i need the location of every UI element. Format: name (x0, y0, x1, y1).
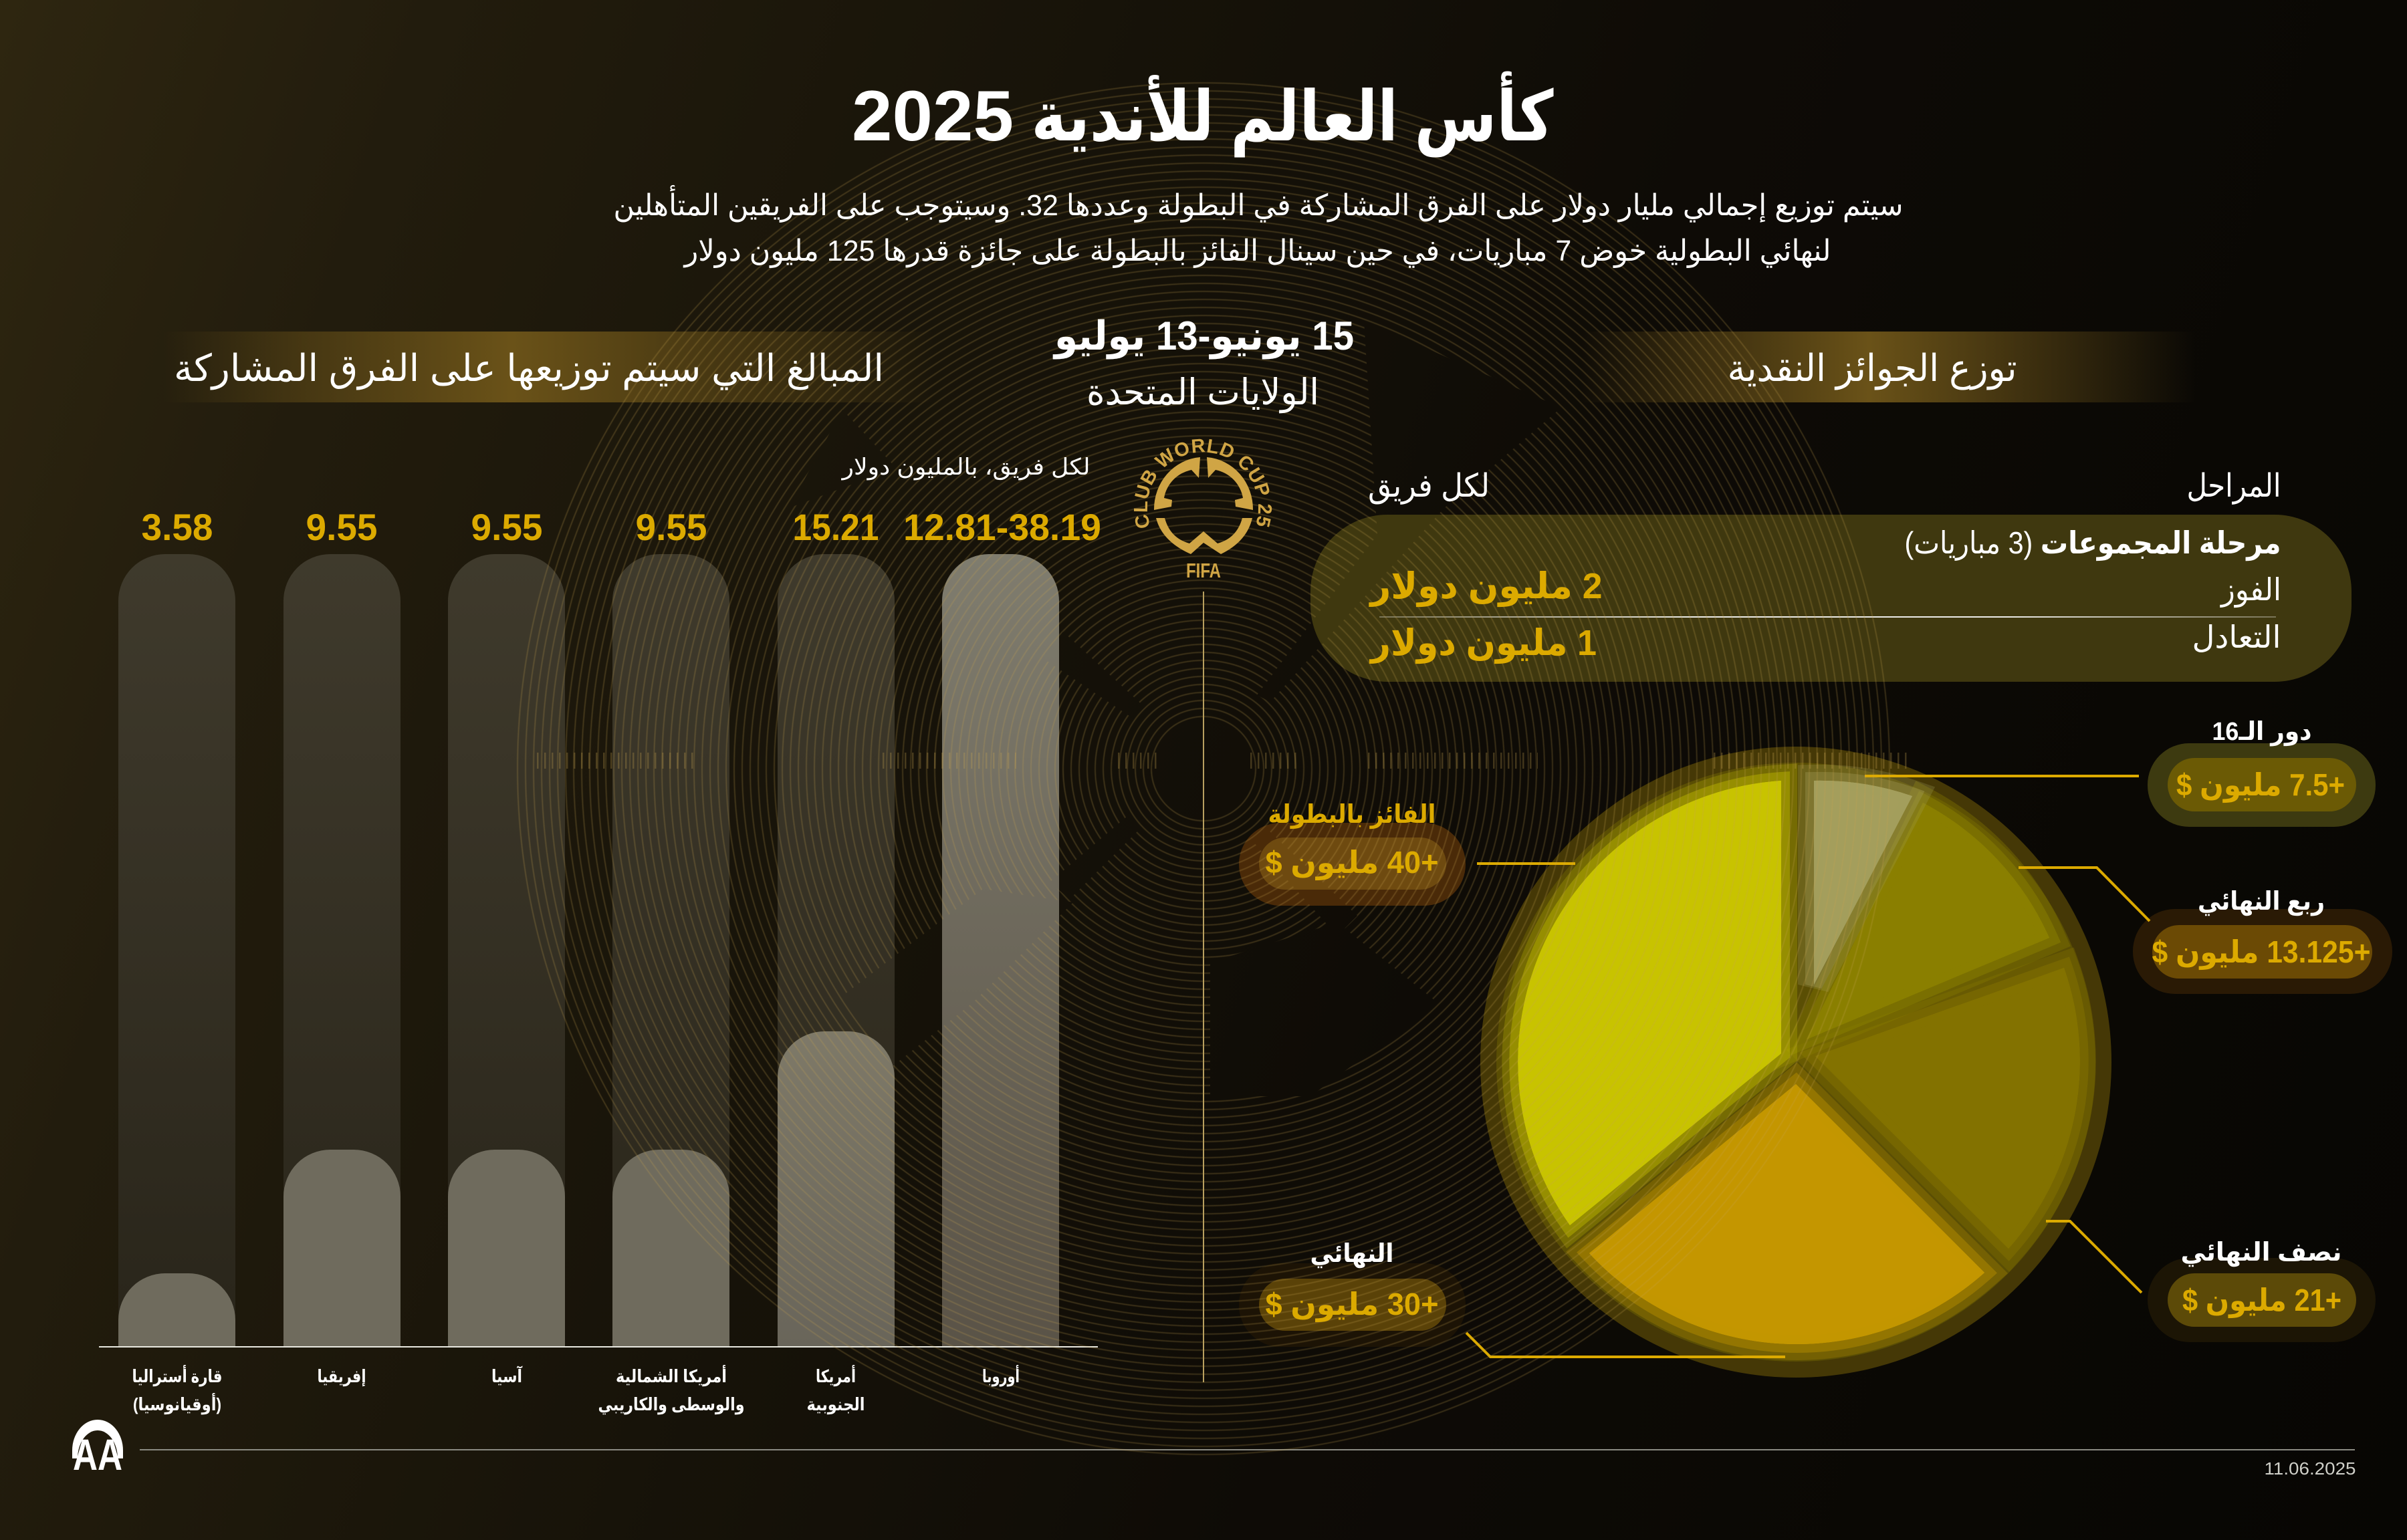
slice: round of 16 (1814, 781, 1912, 985)
callout: semi-final: نصف النهائي (2181, 1239, 2341, 1267)
slice: quarter-final (1807, 803, 2049, 1039)
bar values: 12.81-38.19 (903, 506, 1101, 548)
slice: final (1589, 1084, 1984, 1344)
callout: round of 16: +7.5 مليون $ (2176, 767, 2345, 803)
bar category labels: آسيا (491, 1366, 523, 1386)
table header: المراحل (2186, 469, 2281, 505)
heading: prize distribution (1602, 332, 2168, 402)
bar category labels: قارة أستراليا (132, 1365, 222, 1387)
callout: round of 16: دور الـ16 (2212, 718, 2312, 747)
callout: tournament winner (1239, 801, 1575, 906)
bar values: 3.58 (142, 506, 213, 548)
callout: final (1239, 1240, 1785, 1358)
heading: prize distribution: توزع الجوائز النقدية (1728, 347, 2017, 390)
slice: semi-final (1815, 968, 2080, 1249)
bar values: 15.21 (793, 506, 879, 548)
slice: tournament winner (1518, 781, 1781, 1225)
bar: Europe (942, 554, 1059, 1346)
heading: amounts per team (174, 332, 897, 402)
bar values: 9.55 (471, 506, 543, 548)
bar: Oceania (118, 554, 235, 1346)
bar category labels: إفريقيا (317, 1366, 366, 1387)
row: win (1369, 566, 2281, 608)
bar category labels: أوروبا (982, 1365, 1020, 1387)
bar category labels: أمريكا الشمالية (616, 1365, 727, 1387)
icon: AA logo: AA (73, 1430, 122, 1479)
panel: group stage prize table (1310, 469, 2352, 682)
bar category labels: (أوقيانوسيا) (133, 1393, 221, 1415)
callout: semi-final (2046, 1220, 2376, 1342)
dates and host: الولايات المتحدة (1086, 372, 1319, 413)
row: draw: التعادل (2192, 620, 2281, 654)
pie chart: prize money by stage (1480, 747, 2111, 1378)
callout: tournament winner: الفائز بالبطولة (1268, 801, 1436, 829)
subtitle text block: سيتم توزيع إجمالي مليار دولار على الفرق المشاركة في البطولة وعددها 32. وسيتوجب على الفريقين المتأهلين (614, 184, 1903, 223)
centre divider line (1203, 592, 1204, 1382)
date stamp: 11.06.2025 (2264, 1458, 2356, 1479)
callout: quarter-final (2019, 866, 2392, 994)
bar values: 9.55 (306, 506, 377, 548)
callout: semi-final: +21 مليون $ (2182, 1283, 2341, 1318)
chart unit caption: لكل فريق، بالمليون دولار (840, 455, 1090, 481)
heading: amounts per team: المبالغ التي سيتم توزيعها على الفرق المشاركة (174, 347, 884, 390)
callout: final: +30 مليون $ (1265, 1287, 1439, 1322)
bar: Africa (283, 554, 400, 1346)
table header (1368, 469, 2281, 505)
dates and host: 15 يونيو-13 يوليو (1052, 313, 1354, 360)
bar chart: amounts by continent (99, 455, 1101, 1415)
table header: لكل فريق (1368, 469, 1490, 505)
bar values: 9.55 (635, 506, 707, 548)
subtitle text block: لنهائي البطولية خوض 7 مباريات، في حين سينال الفائز بالبطولة على جائزة قدرها 125 مليون دولار (683, 235, 1831, 268)
bar: Asia (448, 554, 565, 1346)
logo: FIFA Club World Cup 25 (1134, 438, 1272, 582)
title: 2025 (852, 76, 1014, 156)
row: win: 2 مليون دولار (1369, 566, 1602, 607)
callout: round of 16 (1865, 718, 2376, 827)
logo: FIFA Club World Cup 25: FIFA (1186, 559, 1221, 582)
row: draw (1369, 620, 2281, 664)
subtitle text block (614, 184, 1903, 268)
bar: North America (612, 554, 729, 1346)
row: win: الفوز (2220, 572, 2281, 608)
dates and host (1052, 313, 1354, 413)
bar category labels: الجنوبية (806, 1394, 865, 1415)
footer rule (140, 1449, 2355, 1450)
title: كأس العالم للأندية (1031, 71, 1554, 158)
row: group stage: مرحلة المجموعات (3 مباريات) (1904, 525, 2281, 561)
bar: South America (778, 554, 895, 1346)
callout: final: النهائي (1310, 1240, 1393, 1268)
icon: AA logo (72, 1420, 123, 1470)
callout: tournament winner: +40 مليون $ (1265, 845, 1439, 880)
row: draw: 1 مليون دولار (1369, 623, 1597, 664)
bar values (142, 506, 1101, 548)
bar category labels: أمريكا (816, 1365, 856, 1387)
bar category labels (132, 1365, 1020, 1415)
bar category labels: والوسطى والكاريبي (598, 1394, 745, 1415)
title (852, 71, 1554, 158)
logo: FIFA Club World Cup 25: CLUB WORLD CUP 25 (1134, 438, 1272, 528)
callout: quarter-final: ربع النهائي (2198, 888, 2325, 916)
callout: quarter-final: +13.125 مليون $ (2152, 934, 2371, 970)
